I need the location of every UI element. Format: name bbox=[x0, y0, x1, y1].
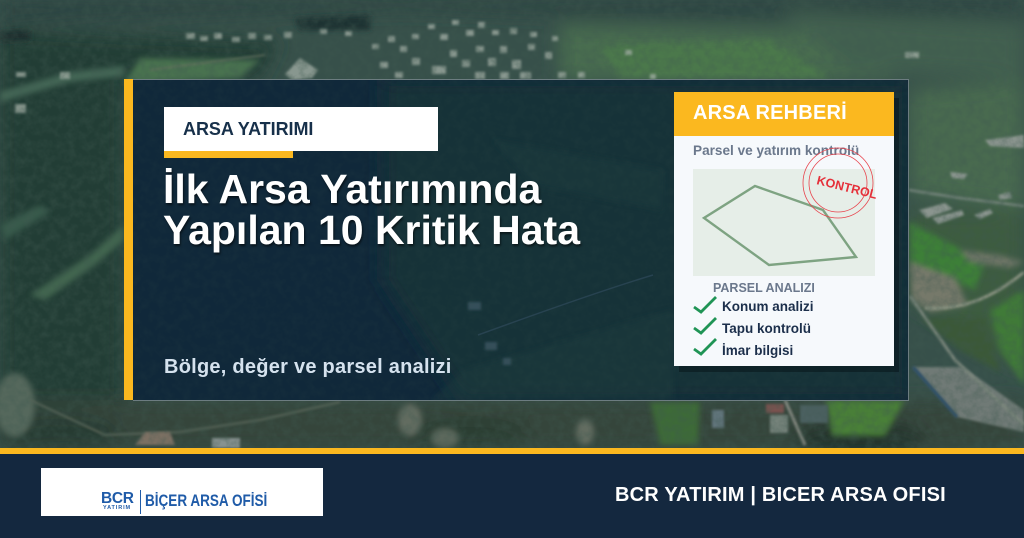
item: konum: Konum analizi bbox=[722, 299, 814, 314]
logo divider bbox=[140, 490, 141, 514]
category text: ARSA YATIRIMI bbox=[183, 119, 313, 139]
footer band bbox=[0, 448, 1024, 538]
title bbox=[163, 166, 582, 256]
accent bar bbox=[124, 79, 133, 400]
item: tapu bbox=[693, 317, 811, 336]
panel: dark overlay bbox=[133, 79, 909, 401]
title: Yapılan 10 Kritik Hata bbox=[163, 207, 580, 253]
label underline bbox=[164, 151, 293, 158]
logo: BCR: BCR bbox=[101, 490, 134, 507]
logo: yatirim: YATIRIM bbox=[103, 505, 131, 511]
item: imar bbox=[693, 338, 793, 358]
logo box bbox=[41, 468, 323, 516]
stamp: kontrol bbox=[802, 148, 879, 218]
card subtitle: Parsel ve yatırım kontrolü bbox=[693, 143, 859, 158]
section label: PARSEL ANALIZI bbox=[713, 281, 815, 295]
footer accent line bbox=[0, 448, 1024, 454]
footer text: BCR YATIRIM | BICER ARSA OFISI bbox=[615, 484, 946, 506]
category label bbox=[164, 107, 438, 151]
item: konum bbox=[693, 296, 814, 314]
stamp: kontrol: KONTROL bbox=[815, 173, 879, 202]
item: tapu: Tapu kontrolü bbox=[722, 321, 811, 336]
title: İlk Arsa Yatırımında bbox=[163, 166, 541, 212]
parcel map bbox=[693, 169, 875, 276]
card: arsa rehberi bbox=[674, 92, 894, 366]
card header bbox=[674, 92, 894, 136]
checklist bbox=[693, 296, 814, 358]
card heading: ARSA REHBERİ bbox=[693, 102, 847, 124]
logo: office name: BİÇER ARSA OFİSİ bbox=[145, 492, 267, 510]
subtitle: Bölge, değer ve parsel analizi bbox=[164, 356, 452, 378]
item: imar: İmar bilgisi bbox=[722, 343, 793, 358]
parcel outline bbox=[704, 186, 856, 265]
